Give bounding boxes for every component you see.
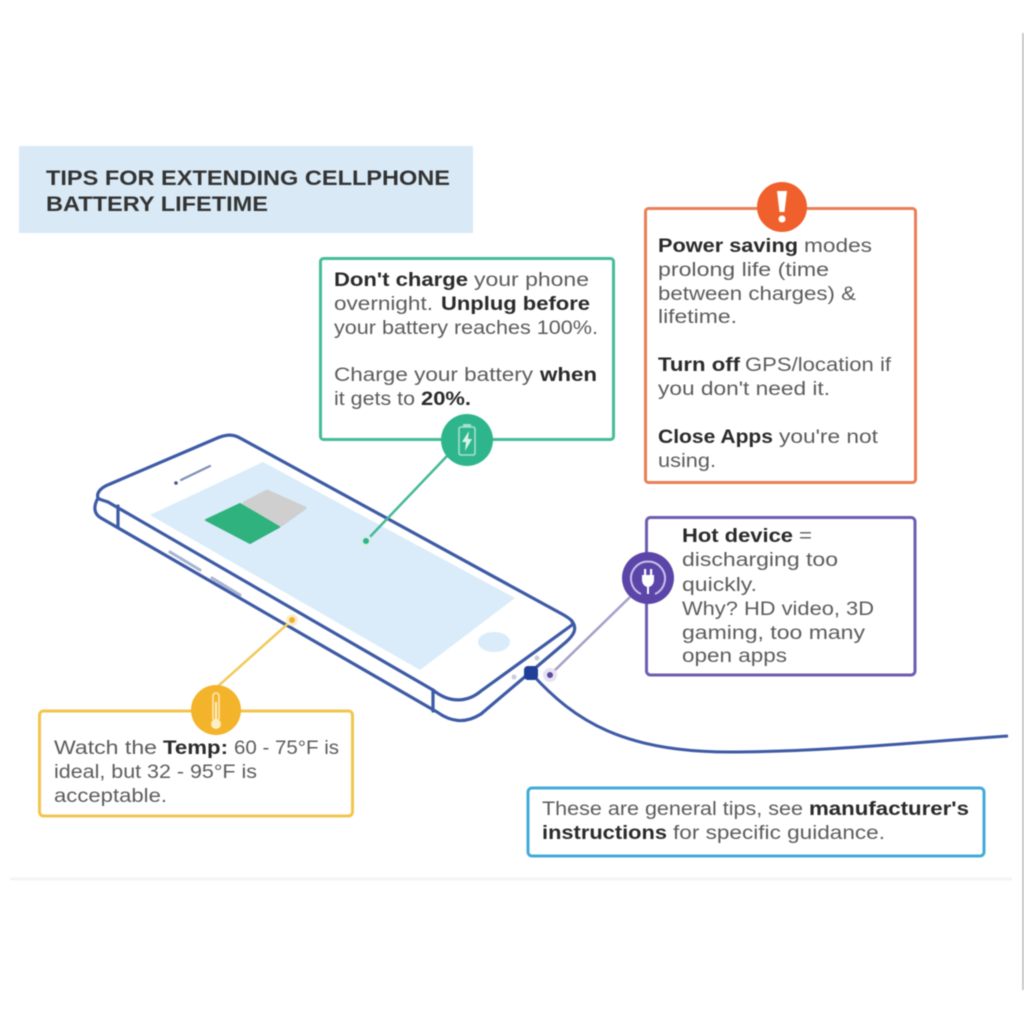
icon: plug bbox=[622, 552, 674, 604]
panel: hot device: quickly. bbox=[682, 575, 757, 596]
panel: charging: 20%. bbox=[421, 389, 471, 410]
icon: exclamation mark bbox=[757, 182, 807, 232]
panel: hot device: Hot device bbox=[682, 526, 793, 547]
panel: power saving: you're not bbox=[779, 427, 879, 448]
panel: charging bbox=[320, 258, 614, 466]
panel: power saving: Power saving bbox=[658, 236, 798, 257]
icon: thermometer bbox=[191, 685, 241, 735]
panel: power saving: Turn off bbox=[658, 355, 741, 376]
panel: power saving bbox=[646, 182, 916, 482]
panel: temperature: Watch the bbox=[54, 738, 157, 759]
panel: power saving: between charges) & bbox=[658, 284, 856, 305]
panel: power saving: you don't need it. bbox=[658, 379, 830, 400]
panel: general note: manufacturer's bbox=[809, 799, 969, 820]
panel: charging: your phone bbox=[474, 270, 589, 291]
connector: charging tip bbox=[360, 456, 447, 547]
phone screen bbox=[150, 462, 515, 670]
charging cable bbox=[524, 666, 1008, 752]
port dots bbox=[512, 656, 540, 680]
home button bbox=[478, 632, 510, 652]
panel: power saving: using. bbox=[658, 451, 716, 472]
panel: hot device: discharging too bbox=[682, 550, 838, 571]
panel: charging: Charge your battery bbox=[334, 365, 534, 386]
panel: general note bbox=[528, 788, 984, 856]
connector: temperature tip bbox=[216, 614, 298, 688]
panel: hot device bbox=[622, 518, 915, 675]
panel: temperature: ideal, but 32 - 95°F is bbox=[54, 762, 257, 783]
panel: temperature bbox=[40, 685, 352, 816]
panel: charging: Unplug before bbox=[441, 294, 590, 315]
panel: hot device: gaming, too many bbox=[682, 623, 866, 644]
connector: hot device tip bbox=[543, 597, 630, 682]
phone body outline bbox=[95, 435, 575, 721]
panel: general note: for specific guidance. bbox=[673, 823, 885, 844]
battery graphic bbox=[206, 491, 305, 543]
icon: battery bbox=[441, 414, 493, 466]
panel: charging: Don't charge bbox=[334, 270, 468, 291]
panel: hot device: = bbox=[799, 526, 812, 547]
panel: charging: it gets to bbox=[334, 389, 415, 410]
panel: general note: instructions bbox=[542, 823, 667, 844]
panel: power saving: Close Apps bbox=[658, 427, 773, 448]
panel: general note: These are general tips, see bbox=[542, 799, 803, 820]
title bbox=[19, 146, 473, 233]
side buttons bbox=[170, 552, 240, 595]
panel: temperature: acceptable. bbox=[54, 786, 167, 807]
panel: charging: overnight. bbox=[334, 294, 433, 315]
panel: temperature: 60 - 75°F is bbox=[234, 738, 339, 759]
title: TIPS FOR EXTENDING CELLPHONE bbox=[46, 167, 450, 190]
panel: power saving: prolong life (time bbox=[658, 260, 829, 281]
panel: power saving: GPS/location if bbox=[745, 355, 892, 376]
panel: hot device: Why? HD video, 3D bbox=[682, 599, 874, 620]
panel: charging: your battery reaches 100%. bbox=[334, 318, 598, 339]
title: BATTERY LIFETIME bbox=[46, 193, 268, 216]
speaker and camera bbox=[174, 466, 210, 485]
panel: power saving: modes bbox=[804, 236, 872, 257]
panel: hot device: open apps bbox=[682, 646, 787, 667]
panel: power saving: lifetime. bbox=[658, 307, 737, 328]
panel: charging: when bbox=[539, 365, 597, 386]
panel: temperature: Temp: bbox=[163, 738, 228, 759]
illustration: smartphone bbox=[95, 435, 575, 721]
